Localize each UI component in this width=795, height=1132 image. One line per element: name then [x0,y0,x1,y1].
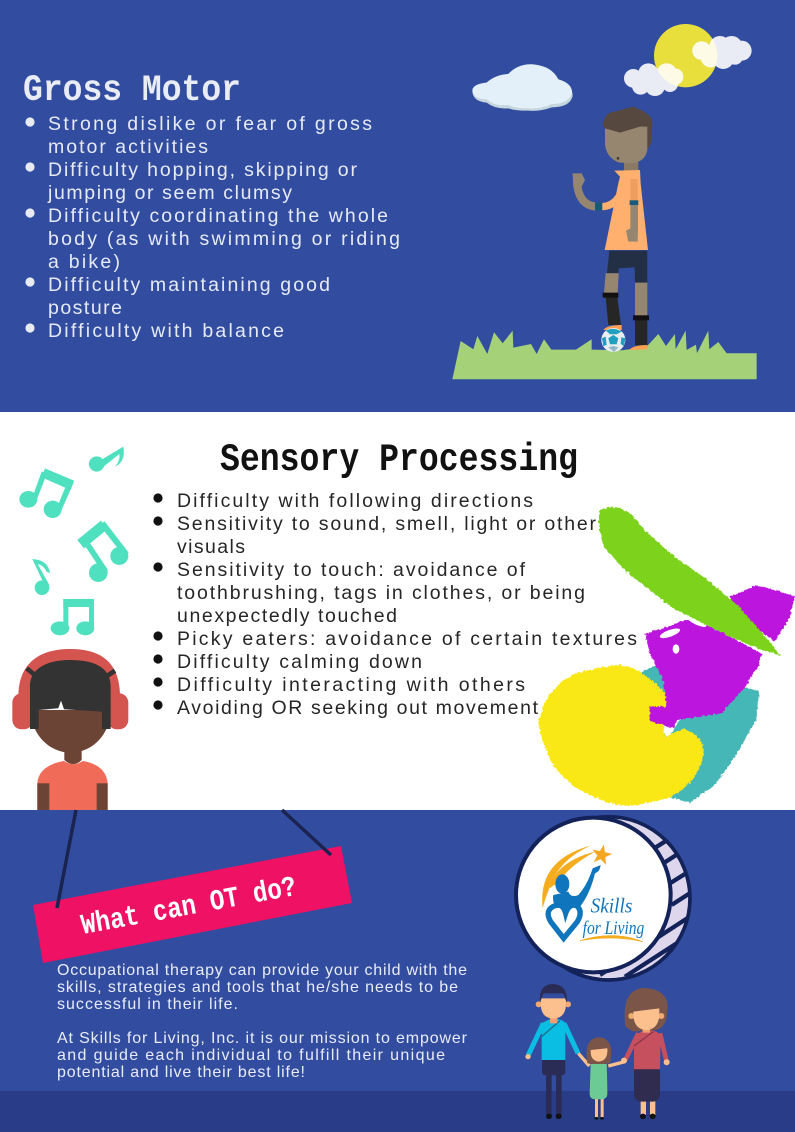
icon: large cloud [472,64,573,111]
logo: Skills for Living [542,842,644,942]
list: gross motor signs: a bike) [48,251,120,273]
icon: grass [452,331,757,379]
list: gross motor signs: jumping or seem clumsy [47,182,292,204]
illustration: music notes and girl with headphones [12,447,129,810]
icon: two small clouds [624,36,752,96]
figure: father [525,984,578,1119]
list: sensory processing signs: Picky eaters: avoidance of certain textures [177,628,637,650]
text block: OT mission [57,962,468,1081]
figure: girl with headphones [12,649,128,810]
list: gross motor signs: Difficulty hopping, skipping or [48,159,358,181]
list: sensory processing signs: Difficulty with following directions [177,490,533,512]
illustration: paint splashes [538,507,795,806]
list: sensory processing signs: Difficulty interacting with others [177,674,525,696]
list: sensory processing signs: unexpectedly touched [177,605,397,627]
list: sensory processing signs [153,490,637,719]
figure: mother [621,988,670,1119]
text block: OT mission: At Skills for Living, Inc. it is our mission to empower [57,1030,468,1047]
list: gross motor signs: Difficulty coordinating the whole [48,205,388,227]
list: gross motor signs: Difficulty with balance [48,320,284,342]
list: sensory processing signs: visuals [177,536,245,558]
list: sensory processing signs: Difficulty calming down [177,651,422,673]
list: sensory processing signs: toothbrushing, tags in clothes, or being [177,582,585,604]
list: gross motor signs: Difficulty maintaining good [48,274,330,296]
banner title text: What can OT do? [79,871,299,943]
panel: gross motor background [0,0,795,412]
text block: OT mission: successful in their life. [57,996,238,1013]
list: sensory processing signs: Sensitivity to touch: avoidance of [177,559,526,581]
list: sensory processing signs: Avoiding OR seeking out movement [177,697,539,719]
list: gross motor signs: motor activities [48,136,208,158]
icon: sun [654,24,717,87]
list: gross motor signs: Strong dislike or fear of gross [48,113,372,135]
paint: green stroke [599,507,781,656]
figure: boy [573,107,652,350]
paint: yellow splash [538,665,703,806]
list: gross motor signs: body (as with swimming or riding [48,228,400,250]
illustration: logo badge and family [516,817,700,1120]
badge: white circle [516,818,671,972]
text block: OT mission: Occupational therapy can provide your child with the [57,962,467,979]
panel: sensory processing background [0,412,795,810]
text block: OT mission: potential and live their best life! [57,1064,305,1081]
logo: Skills for Living: Skills [591,896,632,918]
panel: what can OT do background [0,810,795,1132]
panel: gross motor content [23,70,400,342]
heading: Sensory Processing: Sensory Processing [220,438,578,482]
list: gross motor signs: posture [48,297,122,319]
icon: music notes [19,447,129,635]
text block: OT mission: skills, strategies and tools that he/she needs to be [57,979,458,996]
paint: purple splash [645,585,795,728]
illustration: boy with soccer ball, sun and clouds [452,24,757,379]
paint: teal splash [642,663,759,803]
logo: Skills for Living: for Living [583,918,644,939]
panel: sensory processing content [153,438,637,719]
banner: What can OT do? [33,810,352,963]
paint: white speckles on purple [659,614,708,654]
figure: child [578,1037,625,1120]
badge: striped disc [562,814,692,982]
heading: Gross Motor: Gross Motor [23,70,241,112]
list: sensory processing signs: Sensitivity to sound, smell, light or other [177,513,596,535]
text block: OT mission: and guide each individual to fulfill their unique [57,1047,445,1064]
list: gross motor signs [25,113,400,342]
ground band [0,1091,795,1132]
icon: soccer ball [601,328,625,352]
